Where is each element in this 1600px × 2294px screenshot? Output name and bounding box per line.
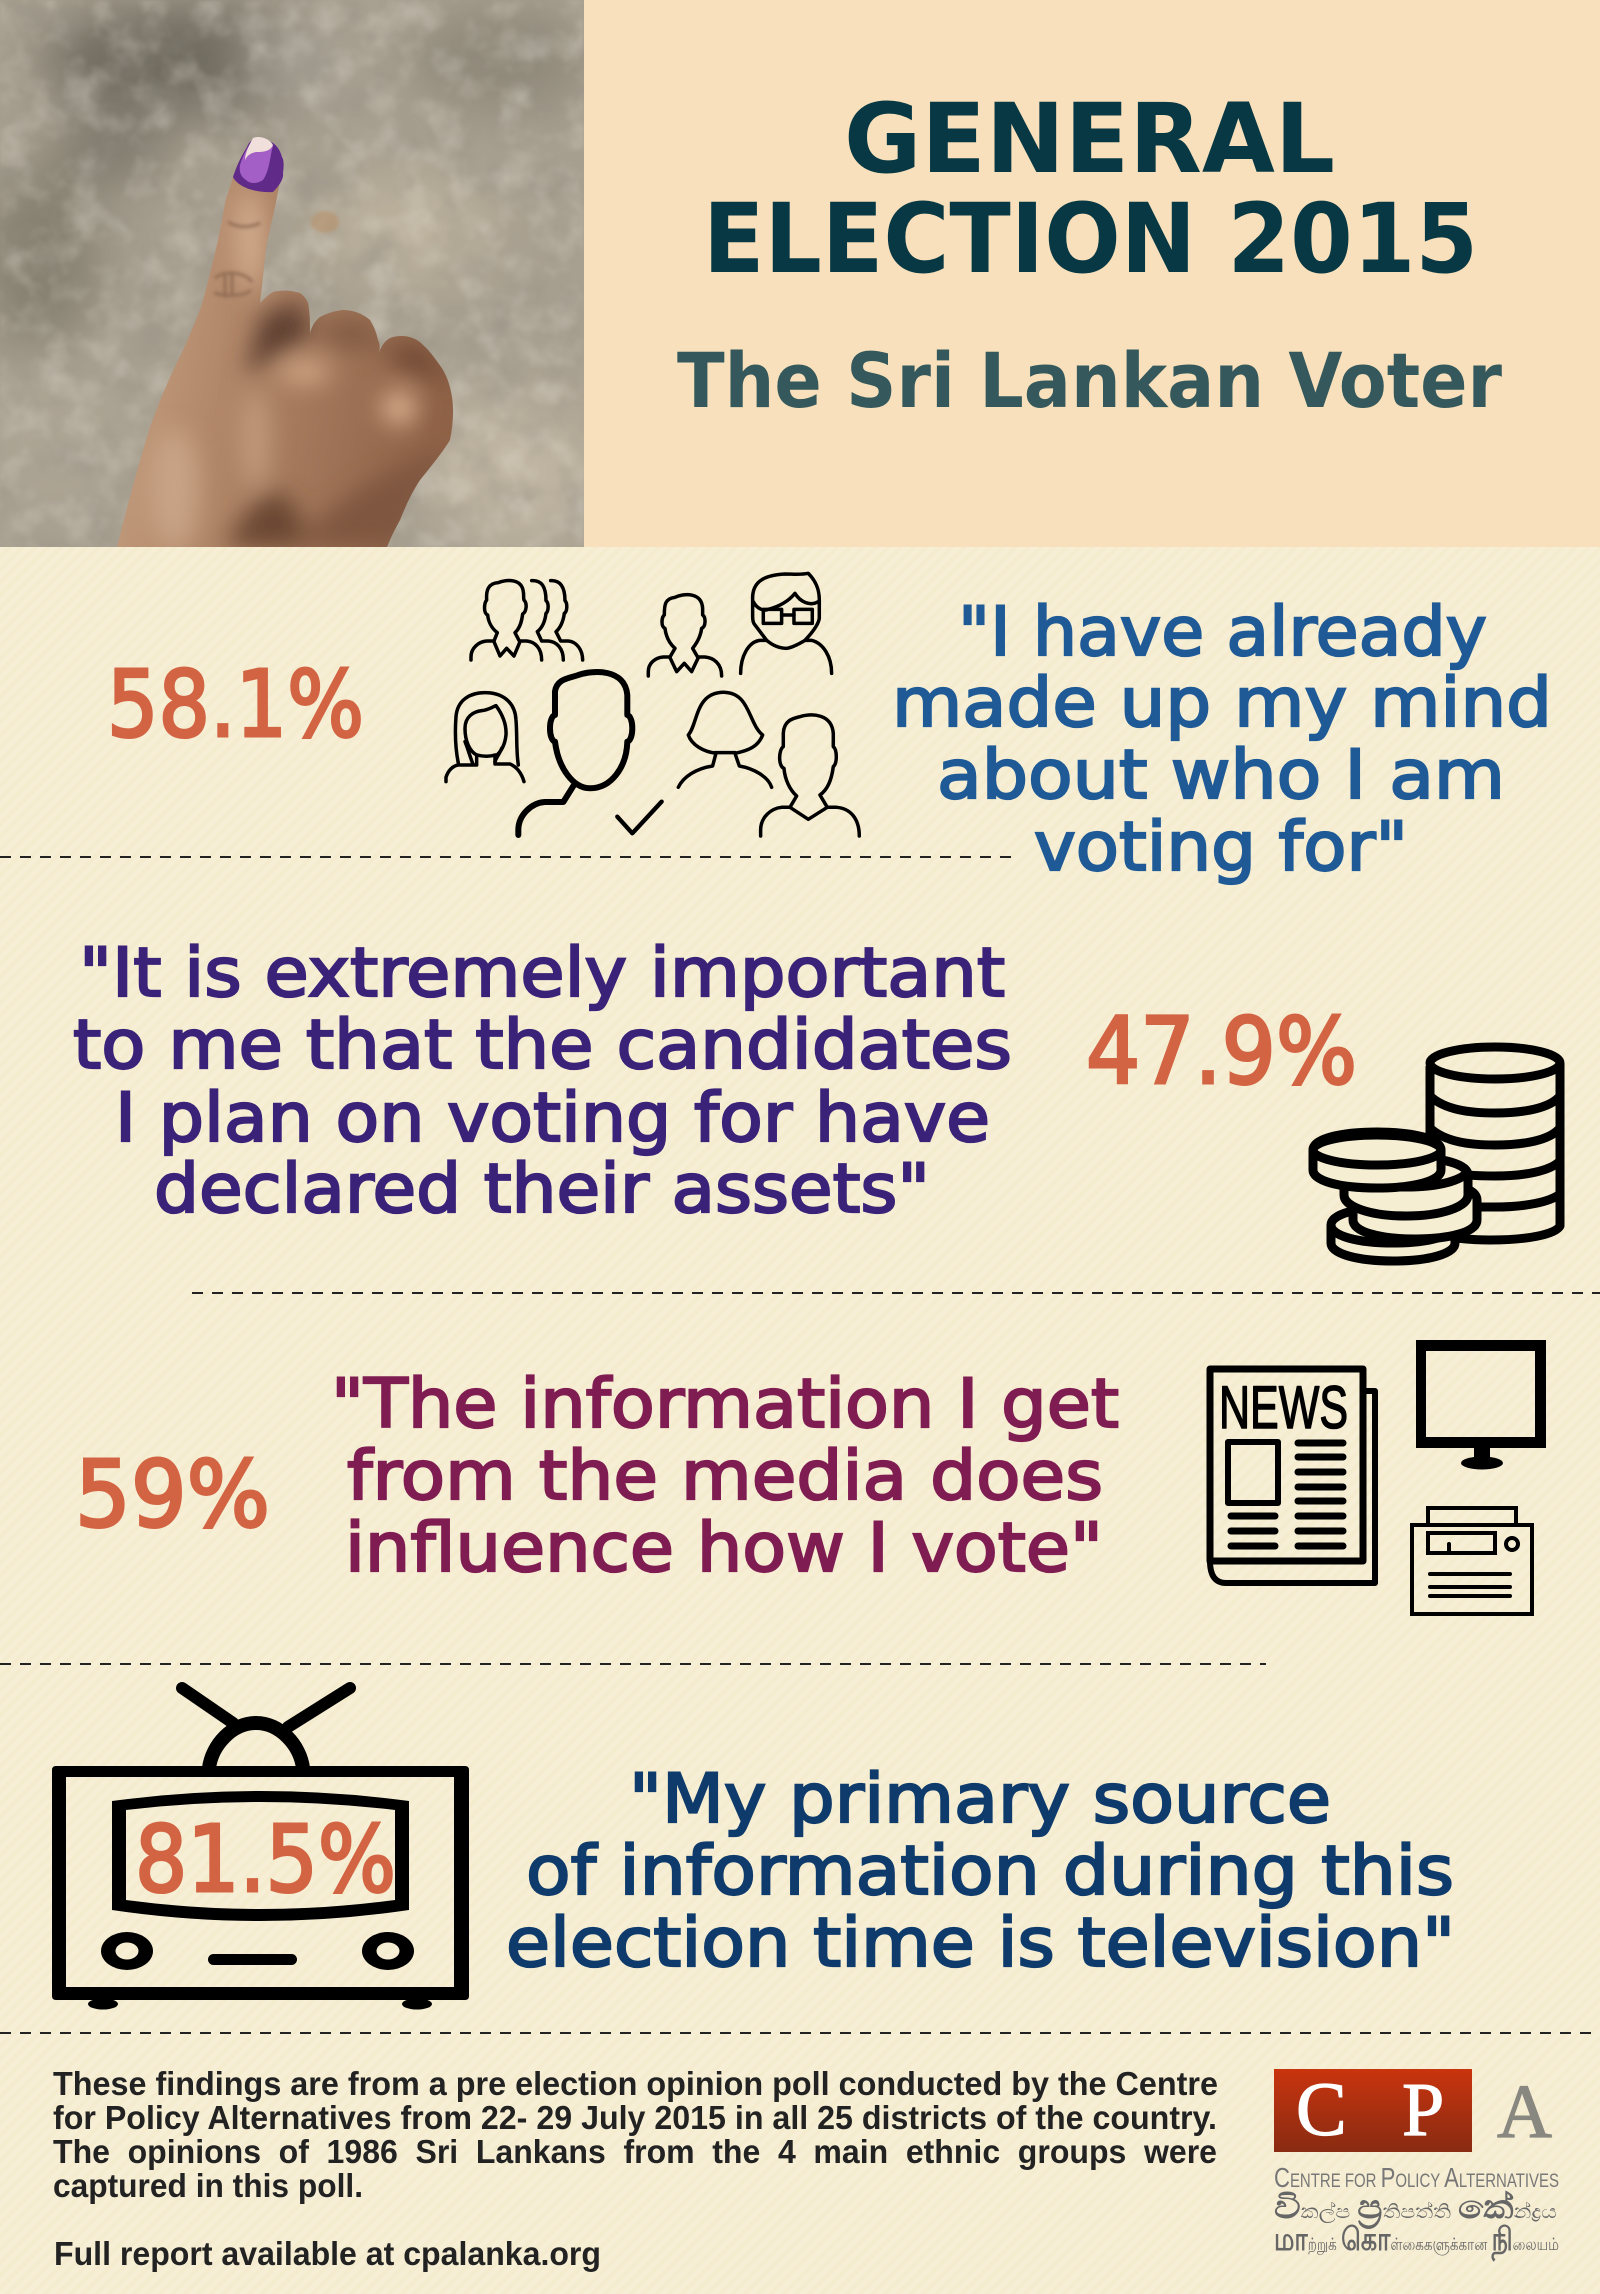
quote: primary source television: of information during this [526,1832,1454,1911]
statistic: 81.5%: 81.5% [135,1806,396,1913]
quote: declared assets: declared their assets" [154,1150,930,1229]
quote: media influence: from the media does [347,1437,1103,1516]
quote: media influence [331,1365,1119,1588]
methodology note: for Policy Alternatives from 22- 29 July 2015 in all 25 districts of the country. [53,2099,1217,2136]
methodology note: The opinions of 1986 Sri Lankans from the 4 main ethnic groups were [53,2133,1217,2170]
subtitle: The Sri Lankan Voter [677,336,1502,425]
hand [117,156,453,547]
quote: media influence: "The information I get [331,1365,1119,1444]
panel: declared assets [73,934,1560,1261]
logo: Centre for Policy Alternatives: විකල්ප ප්‍රතිපත්ති කේ න්ද්‍රය [1274,2188,1557,2229]
quote: declared assets: I plan on voting for have [115,1079,990,1158]
statistic: 47.9%: 47.9% [1086,998,1357,1105]
panel: television [52,1688,1455,2010]
ink-stained nail [233,137,284,192]
quote: made up my mind [892,593,1552,887]
icon: coin stacks [1313,1047,1560,1261]
logo: Centre for Policy Alternatives: A [1497,2070,1552,2154]
icon: newspaper [1210,1369,1375,1583]
statistic: 59%: 59% [75,1441,270,1548]
logo: Centre for Policy Alternatives: P [1402,2068,1444,2152]
quote: media influence: influence how I vote" [345,1509,1103,1588]
icon: radio [1412,1508,1532,1614]
quote: made up my mind: voting for" [1034,808,1408,887]
quote: made up my mind: made up my mind [892,664,1552,743]
icon: group of people with check mark [446,573,859,836]
panel: decided voters [107,573,1552,887]
header panel background [584,0,1600,547]
title: GENERAL [844,83,1335,195]
methodology note: These findings are from a pre election opinion poll conducted by the Centre [53,2065,1218,2102]
logo: Centre for Policy Alternatives: மாற்றுக் கொள்கைகளுக்கான நிலையம் [1274,2220,1559,2262]
quote: primary source television: "My primary source [629,1760,1331,1839]
logo: Centre for Policy Alternatives: C [1296,2068,1347,2152]
icon: newspaper: NEWS [1219,1374,1348,1441]
photo: inked finger raised against concrete [0,0,600,550]
logo: Centre for Policy Alternatives [1274,2068,1559,2262]
quote: declared assets: to me that the candidates [73,1006,1012,1085]
quote: made up my mind: about who I am [937,736,1505,815]
title [703,83,1478,295]
quote: made up my mind: "I have already [958,593,1487,672]
quote: declared assets [73,934,1012,1229]
quote: declared assets: "It is extremely important [79,934,1005,1013]
panel: media influence [75,1340,1546,1614]
methodology note [53,2065,1218,2272]
icon: monitor [1416,1340,1546,1470]
methodology note: captured in this poll. [53,2167,363,2204]
logo: Centre for Policy Alternatives: CENTRE FOR POLICY ALTERNATIVES [1274,2162,1559,2193]
title: ELECTION 2015 [703,183,1478,295]
quote: primary source television: election time is television" [506,1904,1455,1983]
statistic: 58.1%: 58.1% [107,651,364,758]
methodology note: Full report available at cpalanka.org [54,2235,601,2272]
quote: primary source television [506,1760,1455,1983]
icon: television set [52,1688,469,2010]
